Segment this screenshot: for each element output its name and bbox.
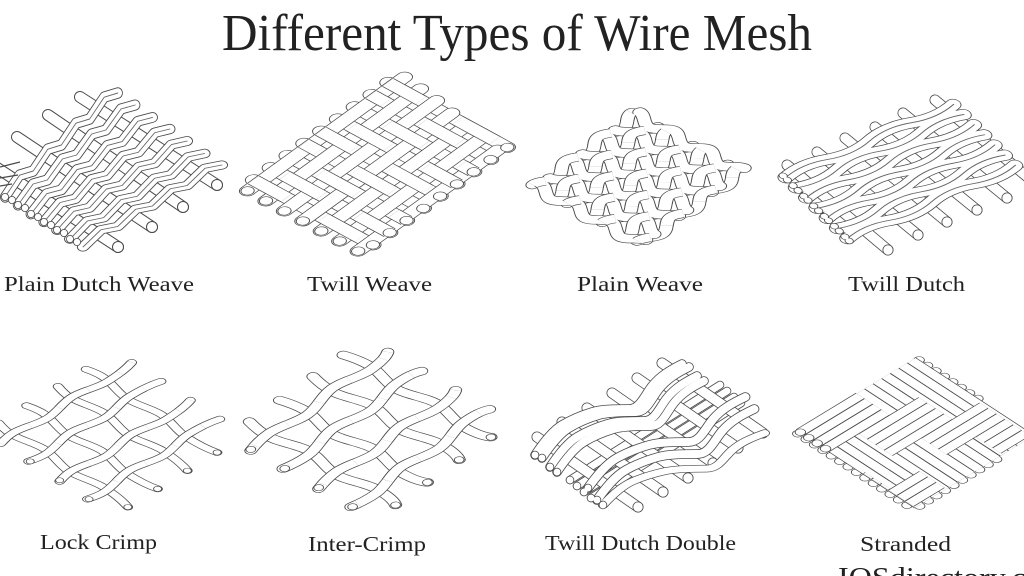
label: plain weave: Plain Weave bbox=[577, 272, 703, 296]
label: twill weave: Twill Weave bbox=[307, 272, 432, 296]
label: twill dutch double: Twill Dutch Double bbox=[545, 531, 736, 555]
label: twill dutch: Twill Dutch bbox=[848, 272, 966, 296]
mesh illustration: plain dutch weave bbox=[0, 93, 222, 247]
mesh illustration: plain weave bbox=[529, 110, 749, 249]
mesh illustration: inter-crimp bbox=[227, 339, 512, 520]
label: lock crimp: Lock Crimp bbox=[40, 530, 157, 554]
label: stranded: Stranded bbox=[860, 532, 952, 556]
mesh illustration: twill dutch double bbox=[535, 363, 765, 507]
mesh illustration: lock crimp bbox=[0, 352, 245, 516]
label: plain dutch weave: Plain Dutch Weave bbox=[4, 272, 194, 296]
mesh illustration: twill weave bbox=[242, 74, 519, 253]
title: Different Types of Wire Mesh bbox=[222, 5, 812, 62]
label: inter-crimp: Inter-Crimp bbox=[308, 532, 426, 556]
mesh illustration: stranded bbox=[794, 358, 1024, 510]
mesh illustration: twill dutch bbox=[783, 100, 1024, 250]
